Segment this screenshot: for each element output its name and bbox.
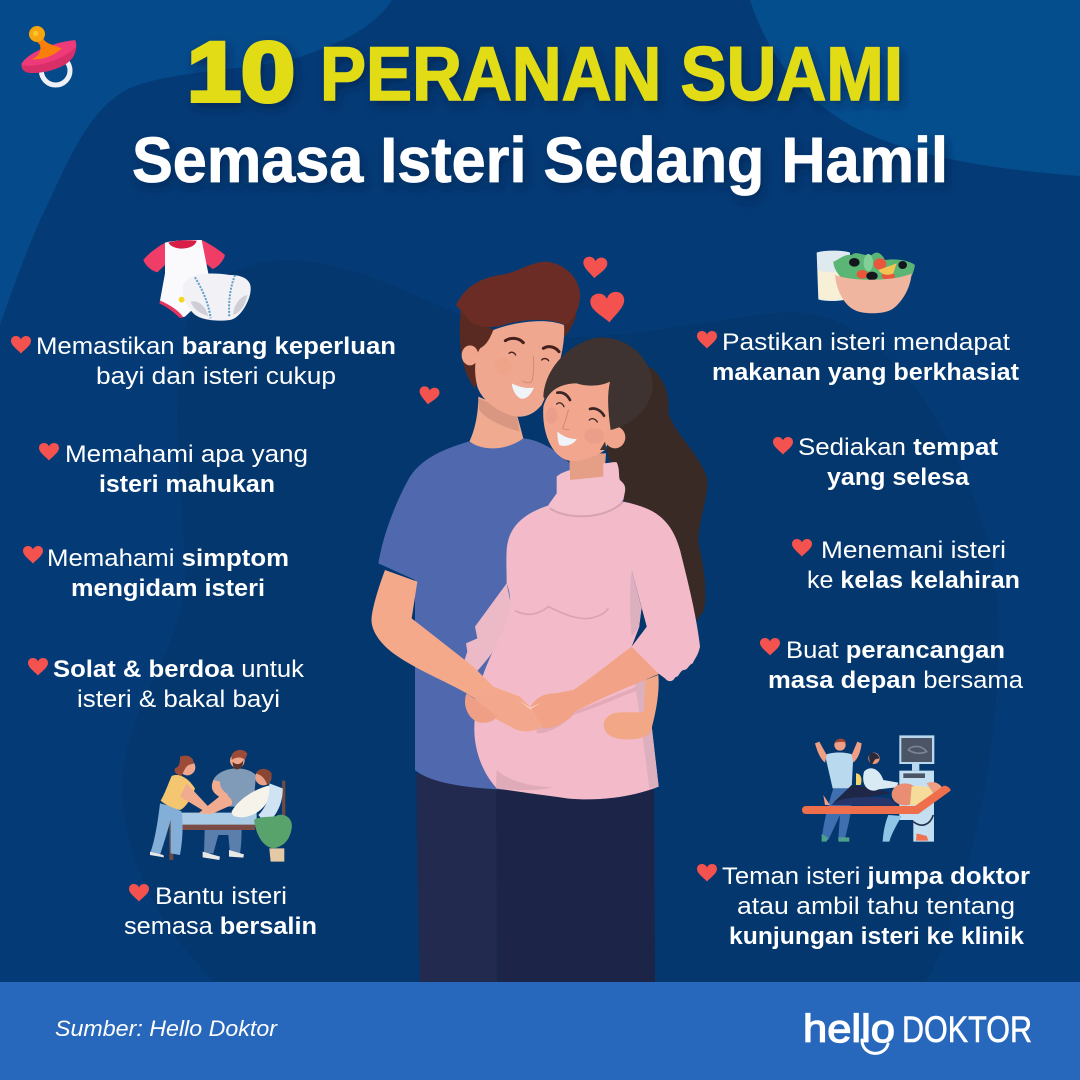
item: jumpa doktor: atau ambil tahu tentang [737, 893, 1015, 920]
woman's ear [605, 426, 625, 448]
man's front arm [371, 570, 540, 732]
man's shirt [378, 438, 573, 790]
left column text [11, 333, 396, 940]
icon: salad and milk [817, 251, 915, 313]
item: barang keperluan: Memastikan barang keperluan [36, 333, 396, 360]
woman's hair top [543, 338, 653, 430]
woman's sweater body [474, 502, 685, 799]
woman's left sleeve ruffle [464, 583, 513, 672]
sweater belly fold line [515, 607, 608, 619]
item: makanan berkhasiat: Pastikan isteri mendapat [722, 329, 1010, 356]
woman's trousers [496, 783, 655, 983]
item: jumpa doktor: kunjungan isteri ke klinik [729, 923, 1025, 950]
item: bersalin: Bantu isteri [155, 883, 287, 910]
item: solat dan berdoa: isteri & bakal bayi [77, 686, 280, 713]
item: isteri mahukan: Memahami apa yang [65, 441, 308, 468]
item: bersalin [124, 883, 317, 940]
belly shadow [496, 770, 553, 790]
hand shadow on belly [537, 687, 638, 733]
icon: birth support scene [150, 750, 292, 862]
heart 1 [582, 256, 608, 279]
man's hand [470, 689, 542, 731]
man's eyebrows and eyes [505, 338, 559, 383]
icon: baby clothes [143, 240, 251, 321]
item: tempat selesa [773, 434, 998, 491]
sleeve underside shading [630, 570, 642, 637]
item: isteri mahukan: isteri mahukan [99, 471, 275, 498]
item: tempat selesa: yang selesa [827, 464, 970, 491]
title line 1 [187, 25, 903, 119]
woman's right sleeve [632, 548, 700, 681]
item: solat dan berdoa: Solat & berdoa untuk [53, 656, 305, 683]
right column text [697, 329, 1030, 950]
logo: hello doktor [803, 1008, 1032, 1053]
item: simptom mengidam: Memahami simptom [47, 545, 289, 572]
item: barang keperluan [11, 333, 396, 390]
icon: ultrasound scene [802, 735, 951, 842]
man's side hair [460, 310, 493, 388]
item: kelas kelahiran [792, 537, 1020, 594]
man's face [475, 321, 564, 417]
item: simptom mengidam: mengidam isteri [71, 575, 265, 602]
item: simptom mengidam [23, 545, 289, 602]
woman's eyebrows and eyes [557, 392, 604, 430]
man's back arm and hand [604, 675, 659, 739]
navy gap between arm and body [632, 608, 647, 647]
item: tempat selesa: Sediakan tempat [798, 434, 998, 461]
man's trousers [417, 773, 497, 983]
woman's blush [584, 428, 604, 444]
logo: hello doktor: DOKTOR [902, 1009, 1032, 1050]
item: bersalin: semasa bersalin [124, 913, 317, 940]
woman's arm and hand [530, 647, 659, 728]
item: kelas kelahiran: ke kelas kelahiran [807, 567, 1020, 594]
man's neck [469, 397, 523, 448]
item: jumpa doktor: Teman isteri jumpa doktor [722, 863, 1030, 890]
man's hair [456, 262, 580, 327]
item: kelas kelahiran: Menemani isteri [821, 537, 1006, 564]
title [132, 25, 948, 196]
logo: hello doktor: hello [803, 1008, 895, 1051]
item: perancangan masa depan [760, 637, 1024, 694]
source credit: Sumber: Hello Doktor [55, 1016, 279, 1041]
heart 2 [589, 291, 626, 324]
item: jumpa doktor [697, 863, 1030, 950]
title line 1: 10 [187, 25, 295, 119]
illustration: hugging couple [371, 262, 707, 983]
man's smile [512, 383, 534, 399]
woman's smile [557, 432, 577, 446]
heart 3 [418, 386, 440, 406]
item: barang keperluan: bayi dan isteri cukup [96, 363, 336, 390]
sweater shading [635, 677, 659, 788]
man's blush [495, 358, 512, 375]
item: perancangan masa depan: masa depan bersama [768, 667, 1024, 694]
woman's back hair [607, 367, 707, 622]
title line 1: PERANAN SUAMI [320, 32, 903, 117]
icon: pacifier [21, 26, 76, 85]
footer bar [0, 982, 1080, 1080]
title line 2: Semasa Isteri Sedang Hamil [132, 124, 948, 196]
collar [548, 462, 625, 515]
item: isteri mahukan [39, 441, 308, 498]
item: makanan berkhasiat [697, 329, 1019, 386]
hearts around couple [418, 256, 626, 406]
item: makanan berkhasiat: makanan yang berkhasiat [712, 359, 1019, 386]
woman's face [543, 382, 613, 461]
item: solat dan berdoa [28, 656, 305, 713]
item: perancangan masa depan: Buat perancangan [786, 637, 1005, 664]
woman's neck [569, 453, 606, 482]
man's ear [462, 345, 478, 365]
